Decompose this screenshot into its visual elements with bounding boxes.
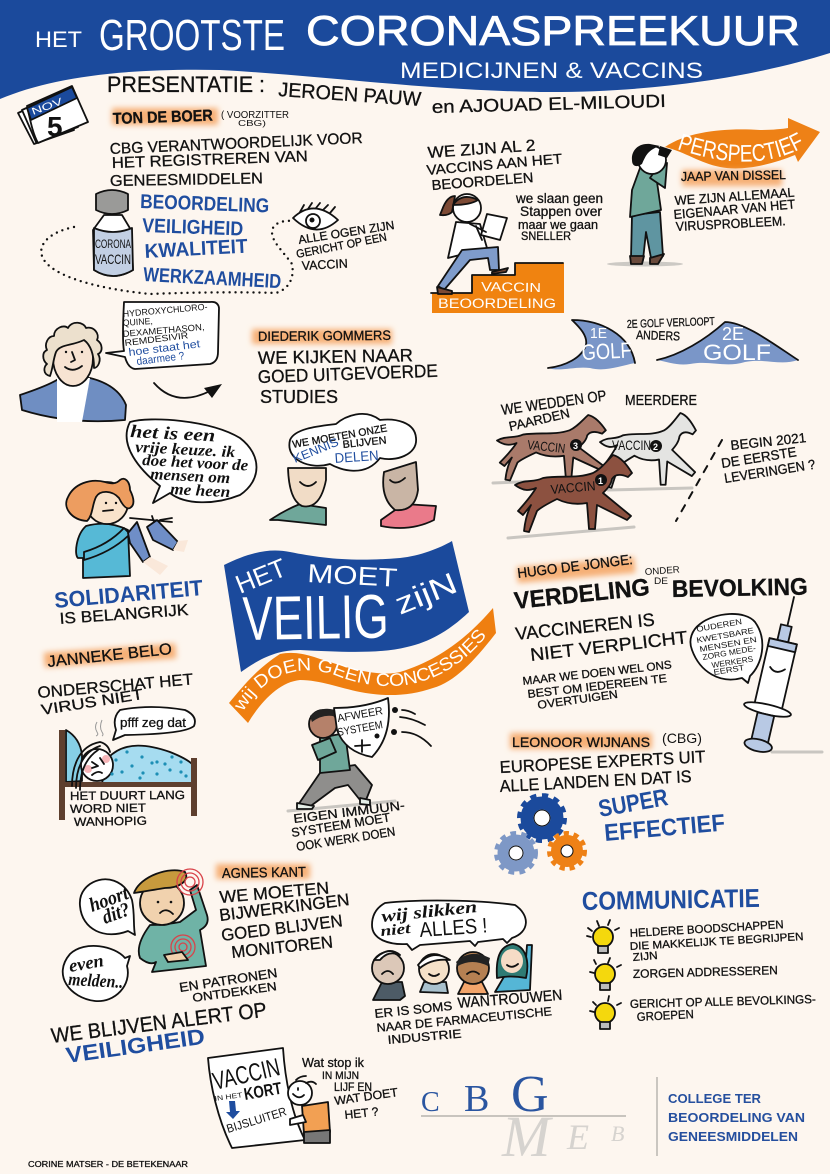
text: wedden op paarden: MEERDERE: [625, 392, 697, 409]
text block: bijwerkingen monitoren: GOED BLIJVEN: [220, 911, 344, 945]
text block: CBG verantwoordelijk: GENEESMIDDELEN: [110, 170, 263, 190]
speech bubble: medicines: HYDROXYCHLORO-: [122, 302, 208, 319]
text block: alle ogen: VACCIN: [301, 257, 348, 273]
illustration: racing horses: 2: [653, 442, 658, 452]
text block: wantrouwen: ER IS SOMS: [374, 999, 453, 1021]
dotted loop around the vial: [41, 221, 293, 294]
text block: bijwerkingen monitoren: MONITOREN: [230, 932, 334, 962]
text block: criteria in blue: VEILIGHEID: [142, 215, 244, 241]
text block: geen stappen: we slaan geen: [515, 190, 603, 206]
text block: begin 2021: [720, 430, 816, 486]
speech bubble: wij slikken niet alles: ALLES !: [419, 914, 488, 942]
banner: het moet veilig zijn: VEILIG: [242, 582, 389, 654]
text: super effectief: EFFECTIEF: [603, 810, 726, 847]
list: communicatie points: HELDERE BOODSCHAPPEN: [629, 919, 784, 940]
text block: bijwerkingen monitoren: WE MOETEN: [219, 878, 330, 907]
heading: communicatie: COMMUNICATIE: [582, 883, 760, 916]
illustration: person in bed: [59, 720, 197, 820]
illustration: four people: [372, 944, 532, 1000]
text: super effectief: [596, 784, 726, 847]
speech bubble: medicines: [106, 302, 219, 369]
list: communicatie points: GROEPEN: [636, 1007, 694, 1024]
text block: criteria in blue: [140, 191, 282, 293]
figure: defender with shield: SYSTEEM: [336, 719, 384, 739]
text block: criteria in blue: BEOORDELING: [140, 191, 270, 217]
icon: vaccine vial: [93, 190, 133, 276]
text block: geen stappen: [515, 190, 603, 243]
icon: light bulb 2: [590, 958, 621, 990]
logo: CBG MEB: C: [421, 1087, 440, 1118]
text block: wat stop ik: [302, 1055, 399, 1122]
speech bubble: vrije keuze: me heen: [170, 481, 231, 501]
stairs: vaccin beoordeling: VACCIN: [481, 279, 541, 295]
dashed finish line: [676, 440, 722, 521]
text block: goed uitgevoerde studies: STUDIES: [260, 387, 338, 407]
banner: het moet veilig zijn: zijN: [390, 567, 462, 621]
text: solidariteit is belangrijk: IS BELANGRIJK: [59, 602, 189, 628]
logo: CBG MEB: G: [511, 1066, 549, 1123]
text: super effectief: SUPER: [596, 784, 670, 823]
divider and college name: COLLEGE TER: [668, 1092, 761, 1106]
portrait: curly man: [20, 323, 126, 422]
subtitle: MEDICIJNEN & VACCINS: [400, 58, 703, 83]
icon: eye: [293, 203, 338, 230]
ribbon: wij doen geen concessies: wij DOEN GEEN CONCESSIES: [235, 630, 485, 710]
speech bubble: pfff zeg dat: [113, 707, 195, 740]
text block: vaccineren niet verplicht: BEST OM IEDEREEN TE: [527, 673, 668, 701]
speech bubble: pfff zeg dat: pfff zeg dat: [120, 715, 186, 730]
text block: het duurt lang: WANHOPIG: [74, 814, 147, 829]
text block: al 2 vaccins: WE ZIJN AL 2: [427, 137, 536, 162]
text block: wat stop ik: IN MIJN: [322, 1070, 359, 1082]
text block: eigenaar virusprobleem: VIRUSPROBLEEM.: [675, 213, 786, 234]
figure: person with side effects: [134, 869, 208, 972]
icon: calendar: 5: [47, 111, 63, 142]
banner: het moet veilig zijn: HET: [231, 552, 291, 600]
speech bubble: wij slikken niet alles: wij slikken: [380, 897, 478, 926]
text block: verdeling onder de bevolking: ONDER: [644, 565, 680, 578]
presenters: [107, 72, 666, 117]
text: wedden op paarden: [500, 387, 697, 434]
highlight: Ton de Boer: TON DE BOER: [113, 108, 213, 128]
horse 1: [515, 455, 632, 532]
text block: onderschat het virus niet: VIRUS NIET: [40, 686, 144, 719]
illustration: bijsluiter poster: [208, 1048, 305, 1148]
text block: wat stop ik: WAT DOET: [333, 1085, 399, 1108]
text block: CBG verantwoordelijk: [109, 130, 363, 190]
text block: vaccineren niet verplicht: OVERTUIGEN: [537, 689, 619, 712]
icon: light bulb 1: [587, 920, 619, 953]
illustration: bijsluiter poster: IN HET: [214, 1092, 244, 1103]
text block: geen stappen: maar we gaan: [518, 217, 598, 232]
divider and college name: GENEESMIDDELEN: [668, 1130, 798, 1144]
text block: vaccineren niet verplicht: [514, 609, 688, 712]
speech bubble: ouderen eerst: ZORG MEDE-: [702, 644, 757, 662]
text: alert op veiligheid: WE BLIJVEN ALERT OP: [50, 999, 268, 1048]
text block: patronen ontdekken: EN PATRONEN: [178, 965, 278, 995]
text block: begin 2021: BEGIN 2021: [730, 430, 807, 453]
stairs: vaccin beoordeling: [431, 263, 564, 313]
label: 2e golf verloopt anders: ANDERS: [636, 328, 680, 344]
divider and college name: BEOORDELING VAN: [668, 1111, 805, 1125]
icon: vaccine vial: CORONA: [95, 237, 131, 251]
speech bubble: medicines: QUINE,: [122, 316, 153, 328]
highlight: Jaap van Dissel: JAAP VAN DISSEL: [681, 167, 786, 184]
speech bubble: vrije keuze: vrije keuze. ik: [135, 439, 236, 461]
highlight: Janneke Belo: JANNEKE BELO: [47, 641, 173, 671]
text block: alle ogen: ALLE OGEN ZIJN: [297, 218, 395, 247]
label: 2e golf verloopt anders: [627, 316, 715, 344]
illustration: two people: [270, 462, 436, 528]
logo: CBG MEB: B: [464, 1078, 489, 1120]
arrow banner: perspectief: PERSPECTIEF: [678, 132, 802, 162]
text block: eigen immuunsysteem: SYSTEEM MOET: [290, 810, 392, 840]
list: communicatie points: DIE MAKKELIJK TE BEGRIJPEN: [629, 931, 804, 953]
text block: wat stop ik: Wat stop ik: [302, 1055, 364, 1070]
icon: vaccine vial: VACCIN: [95, 251, 131, 267]
text: alert op veiligheid: [50, 999, 268, 1068]
illustration: waves: GOLF: [581, 337, 632, 365]
illustration: racing horses: [493, 413, 696, 538]
highlight: Leonoor Wijnans: LEONOOR WIJNANS: [512, 734, 650, 750]
text block: goed uitgevoerde studies: WE KIJKEN NAAR: [258, 345, 413, 368]
speech bubble: vrije keuze: mensen om: [150, 466, 231, 487]
speech bubble: wij slikken niet alles: [372, 897, 526, 950]
horse 3: [497, 415, 606, 480]
presenters: PRESENTATIE :: [107, 72, 265, 97]
text block: onderschat het virus niet: ONDERSCHAT HET: [37, 671, 194, 702]
highlight: Leonoor Wijnans: [510, 730, 702, 750]
icon: light bulb 3: [590, 996, 621, 1029]
title: CORONASPREEKUUR: [306, 7, 800, 54]
icon: syringe: [734, 597, 822, 757]
cloud bubble: kennis delen: KENNIS: [291, 435, 341, 466]
logo: CBG MEB: E: [566, 1117, 589, 1157]
text block: eigen immuunsysteem: EIGEN IMMUUN-: [293, 798, 406, 826]
illustration: bijsluiter poster: VACCIN: [210, 1053, 283, 1096]
presenters: en AJOUAD EL-MILOUDI: [432, 91, 666, 117]
text block: europese experts: ALLE LANDEN EN DAT IS: [499, 767, 692, 796]
label: 2e golf verloopt anders: 2E GOLF VERLOOPT: [627, 316, 715, 331]
text: wedden op paarden: WE WEDDEN OP: [500, 387, 608, 419]
speech bubble: medicines: hoe staat het: [128, 338, 201, 359]
speech bubble: ouderen eerst: EERST: [713, 663, 745, 677]
text block: wat stop ik: HET ?: [344, 1104, 379, 1122]
text block: verdeling onder de bevolking: [513, 565, 808, 615]
illustration: waves: GOLF: [703, 340, 771, 365]
text block: CBG verantwoordelijk: HET REGISTREREN VAN: [112, 148, 308, 172]
illustration: waves: 1E: [590, 325, 607, 342]
icon: calendar: NOV: [30, 96, 65, 118]
text block: geen stappen: SNELLER: [521, 229, 571, 243]
text block: geen stappen: Stappen over: [520, 203, 602, 219]
divider and college name: [657, 1077, 805, 1156]
text block: patronen ontdekken: ONTDEKKEN: [191, 979, 278, 1005]
text block: criteria in blue: KWALITEIT: [144, 236, 248, 263]
text block: wantrouwen: WANTROUWEN: [457, 987, 563, 1012]
highlight: Ton de Boer: [112, 108, 289, 128]
text block: patronen ontdekken: [178, 965, 278, 1005]
text block: het duurt lang: HET DUURT LANG: [70, 788, 185, 803]
highlight: Diederik Gommers: DIEDERIK GOMMERS: [258, 328, 391, 344]
list: communicatie points: GERICHT OP ALLE BEVOLKINGS-: [630, 992, 816, 1011]
text block: eigenaar virusprobleem: EIGENAAR VAN HET: [673, 196, 796, 222]
cloud bubble: kennis delen: WE MOETEN ONZE: [291, 422, 388, 451]
text block: goed uitgevoerde studies: [257, 345, 438, 407]
title: [35, 7, 800, 60]
text block: verdeling onder de bevolking: DE: [654, 576, 668, 587]
speech bubble: medicines: daarmee ?: [136, 350, 185, 368]
speech bubble: even melden: even: [67, 950, 105, 976]
figure: defender with shield: AFWEER: [336, 705, 384, 725]
text block: criteria in blue: WERKZAAMHEID: [143, 264, 282, 293]
illustration: racing horses: VACCIN: [612, 437, 651, 453]
text block: CBG verantwoordelijk: CBG VERANTWOORDELIJK VOOR: [109, 130, 363, 158]
speech bubble: hoort dit: hoort: [86, 882, 133, 917]
illustration: bijsluiter poster: KORT: [242, 1079, 284, 1104]
text block: al 2 vaccins: VACCINS AAN HET: [426, 150, 563, 178]
speech bubble: ouderen eerst: KWETSBARE: [696, 626, 754, 645]
speech bubble: medicines: DEXAMETHASON,: [122, 322, 205, 339]
header band: [0, 0, 830, 99]
text block: alle ogen: GERICHT OP EEN: [295, 232, 388, 261]
text block: europese experts: EUROPESE EXPERTS UIT: [499, 747, 706, 777]
illustration: waves: 2E: [722, 324, 744, 344]
text block: al 2 vaccins: [426, 137, 563, 193]
logo: CBG MEB: B: [611, 1121, 624, 1146]
text block: verdeling onder de bevolking: VERDELING: [513, 574, 651, 615]
text block: begin 2021: DE EERSTE: [720, 444, 798, 471]
highlight: Ton de Boer: ( VOORZITTER: [221, 110, 289, 121]
stairs: vaccin beoordeling: BEOORDELING: [438, 296, 556, 311]
highlight: Ton de Boer: CBG): [238, 119, 266, 128]
text block: wantrouwen: INDUSTRIE: [387, 1027, 462, 1047]
speech bubble: medicines: REMDESIVIR: [124, 330, 189, 348]
text block: wantrouwen: [374, 987, 563, 1047]
text block: alle ogen: [295, 218, 395, 273]
logo: CBG MEB: M: [501, 1104, 553, 1169]
banner: het moet veilig zijn: [224, 541, 469, 672]
text block: goed uitgevoerde studies: GOED UITGEVOERDE: [257, 361, 438, 387]
text block: eigenaar virusprobleem: [673, 185, 796, 234]
text block: vaccineren niet verplicht: NIET VERPLICHT: [529, 627, 688, 665]
speech bubble: wij slikken niet alles: niet: [380, 921, 412, 940]
text block: eigen immuunsysteem: OOK WERK DOEN: [295, 824, 396, 854]
text block: onderschat het virus niet: [37, 671, 194, 719]
text block: het duurt lang: [70, 788, 185, 829]
banner: het moet veilig zijn: MOET: [307, 558, 398, 593]
speech bubble: ouderen eerst: MENSEN EN: [699, 635, 758, 654]
text block: vaccineren niet verplicht: VACCINEREN IS: [514, 609, 656, 644]
speech bubble: vrije keuze: het is een: [130, 421, 216, 445]
speech bubble: hoort dit: [80, 879, 135, 935]
highlight: Agnes Kant: AGNES KANT: [222, 864, 306, 881]
text: alert op veiligheid: VEILIGHEID: [64, 1024, 206, 1068]
text block: verdeling onder de bevolking: BEVOLKING: [672, 574, 808, 603]
illustration: racing horses: VACCIN: [550, 478, 596, 497]
curved arrow: [154, 383, 222, 398]
text block: wantrouwen: NAAR DE FARMACEUTISCHE: [376, 1004, 552, 1035]
highlight: Hugo de Jonge: HUGO DE JONGE:: [516, 551, 634, 581]
speech bubble: vrije keuze: [127, 419, 257, 503]
illustration: racing horses: 3: [573, 441, 578, 451]
title: HET: [35, 27, 82, 52]
list: communicatie points: [587, 919, 816, 1029]
speech bubble: even melden: melden..: [68, 969, 124, 992]
text: wedden op paarden: PAARDEN: [507, 405, 571, 434]
text block: begin 2021: LEVERINGEN ?: [723, 457, 816, 486]
text block: europese experts: [499, 747, 706, 796]
text block: wat stop ik: LIJF EN: [334, 1080, 372, 1094]
text block: al 2 vaccins: BEOORDELEN: [431, 169, 534, 193]
credit: CORINE MATSER - DE BETEKENAAR: [28, 1159, 188, 1169]
text block: bijwerkingen monitoren: [218, 878, 351, 962]
figure: defender with shield: [288, 698, 431, 811]
speech bubble: ouderen eerst: WERKERS: [711, 655, 754, 670]
speech bubble: vrije keuze: doe het voor de: [142, 452, 249, 475]
figure: small person reading: [288, 1076, 330, 1143]
list: communicatie points: ZORGEN ADDRESSEREN: [633, 963, 778, 981]
title: GROOTSTE: [99, 11, 285, 60]
text block: het duurt lang: WORD NIET: [70, 801, 147, 816]
text block: vaccineren niet verplicht: MAAR WE DOEN WEL ONS: [522, 659, 673, 688]
illustration: waves: [548, 316, 798, 369]
horse 2: [600, 413, 696, 488]
logo: CBG MEB: [421, 1066, 626, 1169]
figure: man with binoculars: [607, 144, 683, 266]
icon: gears: [497, 796, 584, 872]
icon: calendar: [18, 86, 88, 144]
highlight: Leonoor Wijnans: (CBG): [662, 730, 702, 746]
text block: eigen immuunsysteem: [290, 798, 406, 854]
text block: eigenaar virusprobleem: WE ZIJN ALLEMAAL: [674, 185, 795, 208]
text: solidariteit is belangrijk: SOLIDARITEIT: [53, 575, 204, 613]
figure: nurse vaccinating: [66, 479, 188, 578]
speech bubble: ouderen eerst: OUDEREN: [696, 617, 743, 634]
list: communicatie points: ZIJN: [632, 950, 658, 964]
cloud bubble: kennis delen: BLIJVEN: [342, 434, 387, 451]
cloud bubble: kennis delen: [289, 414, 416, 471]
speech bubble: even melden: [63, 946, 130, 1001]
illustration: racing horses: VACCIN: [527, 437, 566, 456]
cloud bubble: kennis delen: DELEN: [334, 447, 379, 466]
speech bubble: hoort dit: dit?: [99, 898, 133, 929]
speech bubble: ouderen eerst: [690, 614, 762, 683]
figure: doctor climbing stairs: [437, 194, 508, 294]
presenters: JEROEN PAUW: [278, 79, 422, 111]
text block: bijwerkingen monitoren: BIJWERKINGEN: [218, 890, 351, 925]
illustration: racing horses: 1: [598, 476, 603, 486]
illustration: bijsluiter poster: BIJSLUITER: [225, 1104, 288, 1136]
